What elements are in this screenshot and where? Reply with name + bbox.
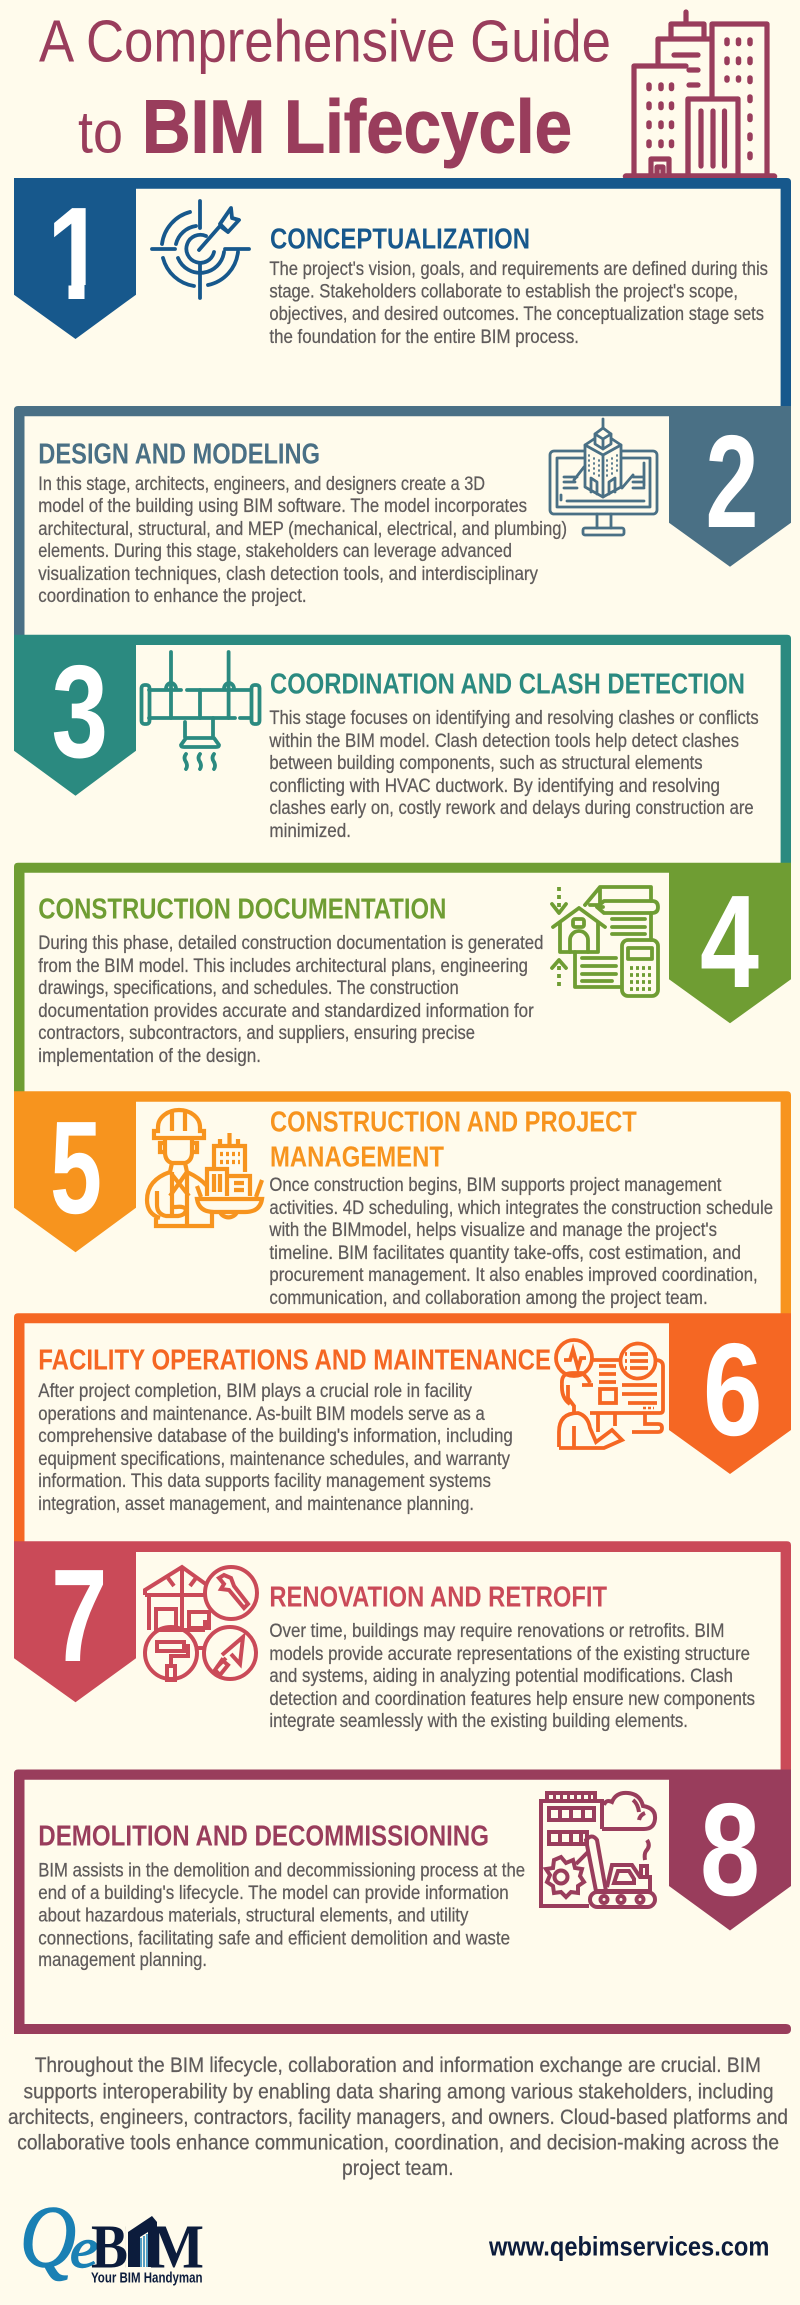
logo: QeBIM: M [150, 2214, 204, 2282]
number 5: 5 [50, 1094, 102, 1241]
text block: During this phase, detailed construction documentation is generated [38, 933, 543, 954]
panel 7 frame and number tab [14, 1541, 791, 1772]
text block: with the BIMmodel, helps visualize and manage the project's [269, 1220, 717, 1241]
closing paragraph [8, 2053, 788, 2180]
text block: integration, asset management, and maintenance planning. [38, 1494, 474, 1515]
text block: equipment specifications, maintenance schedules, and warranty [38, 1449, 510, 1470]
text block: operations and maintenance. As-built BIM models serve as a [38, 1404, 485, 1425]
panel: coordination and clash detection [14, 635, 791, 865]
heading: FACILITY OPERATIONS AND MAINTENANCE [38, 1344, 551, 1376]
panel 2 frame and number tab [14, 406, 791, 637]
text block: models provide accurate representations of the existing structure [269, 1644, 750, 1665]
title: to [78, 99, 123, 165]
heading: DEMOLITION AND DECOMMISSIONING [38, 1821, 489, 1853]
text block: Over time, buildings may require renovations or retrofits. BIM [269, 1621, 724, 1642]
text block: end of a building's lifecycle. The model can provide information [38, 1883, 509, 1904]
panel: construction documentation [14, 863, 791, 1093]
text block [269, 1175, 773, 1309]
title: BIM Lifecycle [142, 84, 572, 168]
panel: construction and project management [14, 1091, 791, 1315]
text block: minimized. [269, 821, 351, 842]
heading: CONSTRUCTION DOCUMENTATION [38, 893, 446, 925]
icon: house plans and calculator [552, 887, 658, 996]
text block [38, 933, 543, 1067]
icon: construction worker with building [147, 1110, 262, 1226]
text block: After project completion, BIM plays a crucial role in facility [38, 1381, 472, 1402]
number 4: 4 [700, 868, 759, 1015]
icon: monitor with building model [550, 419, 657, 535]
text block: connections, facilitating safe and efficient demolition and waste [38, 1928, 510, 1949]
panel: conceptualization [14, 178, 791, 408]
panel: renovation and retrofit [14, 1541, 791, 1772]
logo script letters: Q [20, 2189, 76, 2286]
text block: architectural, structural, and MEP (mechanical, electrical, and plumbing) [38, 519, 567, 540]
heading: RENOVATION AND RETROFIT [269, 1582, 607, 1614]
text block: In this stage, architects, engineers, and designers create a 3D [38, 474, 485, 495]
text block: documentation provides accurate and standardized information for [38, 1001, 534, 1022]
logo BIM letters: B [91, 2214, 128, 2282]
number 8: 8 [700, 1776, 760, 1923]
text block: information. This data supports facility management systems [38, 1471, 491, 1492]
text block: about hazardous materials, structural elements, and utility [38, 1906, 469, 1927]
panel: facility operations and maintenance [14, 1313, 791, 1543]
text block: coordination to enhance the project. [38, 586, 307, 607]
panel 1 frame and number tab [14, 178, 791, 408]
panel: design and modeling [14, 406, 791, 637]
panel: demolition and decommissioning [14, 1770, 791, 2034]
heading: DESIGN AND MODELING [38, 438, 320, 470]
icon: renovation tools and house [145, 1567, 257, 1680]
text block: and systems, aiding in analyzing potential modifications. Clash [269, 1666, 733, 1687]
logo script letters: e [70, 2218, 98, 2280]
icon: demolition machine and building [541, 1793, 655, 1907]
number 1: 1 [47, 180, 105, 327]
text block [38, 474, 567, 607]
icon: ductwork [142, 652, 260, 769]
text block: conflicting with HVAC ductwork. By identifying and resolving [269, 776, 720, 797]
logo: QeBIM [20, 2189, 204, 2287]
text block: drawings, specifications, and schedules. The construction [38, 978, 459, 999]
number 7: 7 [51, 1542, 108, 1689]
icon: technician at monitor [556, 1340, 663, 1448]
text block: management planning. [38, 1950, 207, 1971]
icon: target with arrow [152, 201, 249, 298]
text block: within the BIM model. Clash detection tools help detect clashes [269, 731, 739, 752]
title [39, 9, 611, 168]
text block: communication, and collaboration among the project team. [269, 1288, 708, 1309]
text block: between building components, such as structural elements [269, 753, 703, 774]
text block: BIM assists in the demolition and decommissioning process at the [38, 1860, 525, 1881]
text block: comprehensive database of the building's information, including [38, 1426, 513, 1447]
text block: Once construction begins, BIM supports project management [269, 1175, 722, 1196]
text block [38, 1381, 513, 1515]
text block: the foundation for the entire BIM process. [269, 327, 579, 348]
text block [269, 708, 759, 842]
text block: model of the building using BIM software. The model incorporates [38, 496, 527, 517]
title: A Comprehensive Guide [39, 9, 611, 75]
logo tagline: Your BIM Handyman [91, 2271, 202, 2287]
text block [38, 1860, 525, 1971]
panel 6 frame and number tab [14, 1313, 791, 1543]
text block: timeline. BIM facilitates quantity take-offs, cost estimation, and [269, 1243, 741, 1264]
heading: CONSTRUCTION AND PROJECT [270, 1107, 637, 1139]
heading [270, 1107, 637, 1174]
number 6: 6 [703, 1316, 762, 1463]
website URL: www.qebimservices.com [488, 2232, 769, 2262]
icon: office buildings [626, 12, 774, 176]
text block: stage. Stakeholders collaborate to establish the project's scope, [269, 282, 738, 303]
text block: contractors, subcontractors, and suppliers, ensuring precise [38, 1023, 475, 1044]
logo building as letter I: I [125, 2214, 126, 2282]
number 3: 3 [52, 638, 108, 785]
text block: implementation of the design. [38, 1046, 261, 1067]
closing paragraph: project team. [342, 2156, 454, 2180]
text block: visualization techniques, clash detection tools, and interdisciplinary [38, 564, 538, 585]
text block [269, 259, 768, 348]
text block [269, 1621, 755, 1732]
text block: integrate seamlessly with the existing building elements. [269, 1711, 688, 1732]
number 2: 2 [706, 408, 758, 555]
panel 3 frame and number tab [14, 635, 791, 865]
heading: CONCEPTUALIZATION [270, 224, 530, 256]
panel 4 frame and number tab [14, 863, 791, 1093]
panel 5 frame and number tab [14, 1091, 791, 1315]
heading: MANAGEMENT [270, 1142, 444, 1174]
text block: from the BIM model. This includes architectural plans, engineering [38, 956, 528, 977]
text block: elements. During this stage, stakeholders can leverage advanced [38, 541, 512, 562]
panel 8 frame and number tab [14, 1770, 791, 2034]
